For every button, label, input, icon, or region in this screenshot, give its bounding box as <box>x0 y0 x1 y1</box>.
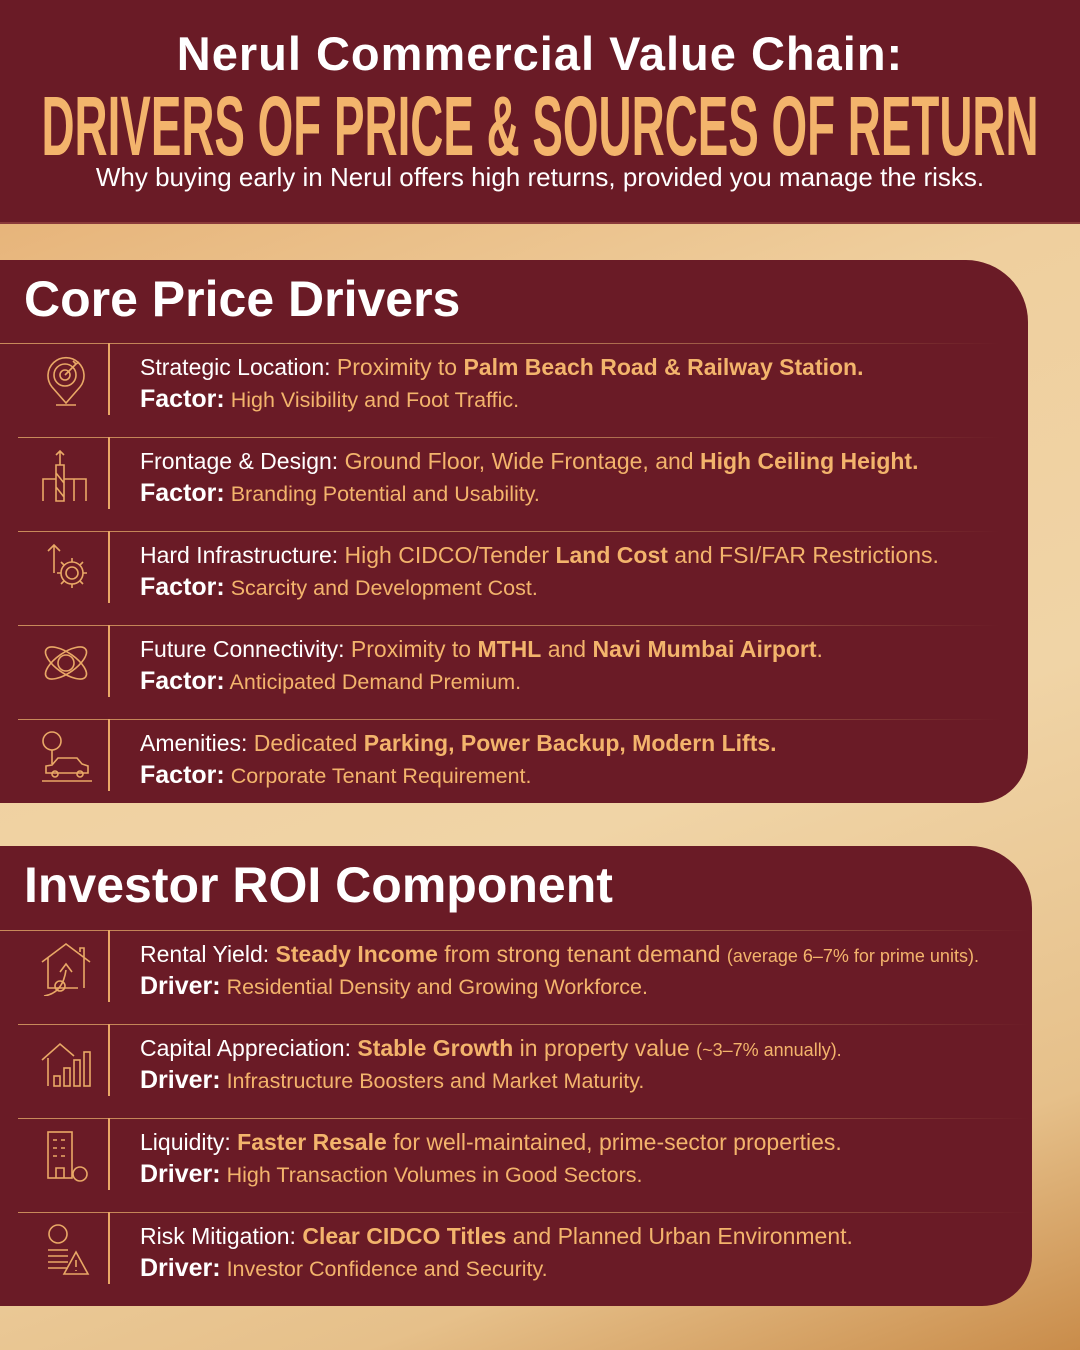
icon: house rupee <box>42 943 90 996</box>
row: frontage <box>18 437 963 509</box>
row: risk mitigation <box>18 1212 991 1284</box>
row: frontage: Factor: Branding Potential and Usability. <box>140 479 540 507</box>
icon: parking car <box>42 731 92 782</box>
heading: investor roi: Investor ROI Component <box>24 857 613 913</box>
row: hard infrastructure <box>18 531 962 603</box>
row: future connectivity: Factor: Anticipated Demand Premium. <box>140 667 521 695</box>
row: liquidity: Liquidity: Faster Resale for well-maintained, prime-sector properties. <box>140 1129 842 1155</box>
row: liquidity: Driver: High Transaction Volumes in Good Sectors. <box>140 1160 642 1188</box>
icon: orbit <box>44 646 88 680</box>
row: frontage: Frontage & Design: Ground Floor, Wide Frontage, and High Ceiling Height. <box>140 448 918 474</box>
row: strategic location <box>0 343 962 415</box>
row: rental yield <box>0 930 990 1002</box>
row: amenities <box>18 719 963 791</box>
row: capital appreciation: Driver: Infrastructure Boosters and Market Maturity. <box>140 1066 644 1094</box>
icon: buildings <box>42 450 87 502</box>
header <box>0 0 1080 224</box>
row: strategic location: Factor: High Visibility and Foot Traffic. <box>140 385 519 413</box>
icon: target pin <box>47 356 85 406</box>
icon: coins warning <box>48 1224 90 1275</box>
row: risk mitigation: Risk Mitigation: Clear CIDCO Titles and Planned Urban Environment. <box>140 1223 853 1249</box>
row: rental yield: Driver: Residential Density and Growing Workforce. <box>140 972 648 1000</box>
tagline: Why buying early in Nerul offers high returns, provided you manage the risks. <box>96 162 984 192</box>
icon: house chart <box>42 1043 91 1087</box>
row: capital appreciation <box>18 1024 991 1096</box>
title: Nerul Commercial Value Chain: <box>177 27 903 80</box>
icon: building coin <box>47 1131 88 1182</box>
row: future connectivity: Future Connectivity: Proximity to MTHL and Navi Mumbai Airport. <box>140 636 823 662</box>
panel: core price drivers <box>0 260 1028 803</box>
row: amenities: Factor: Corporate Tenant Requirement. <box>140 761 532 789</box>
subtitle heading: DRIVERS OF PRICE & SOURCES OF RETURN <box>41 79 1039 173</box>
row: rental yield: Rental Yield: Steady Income from strong tenant demand (average 6–7% for prime units). <box>140 941 979 967</box>
row: amenities: Amenities: Dedicated Parking, Power Backup, Modern Lifts. <box>140 730 777 756</box>
panel: investor roi component <box>0 846 1032 1306</box>
row: strategic location: Strategic Location: Proximity to Palm Beach Road & Railway Station. <box>140 354 864 380</box>
row: hard infrastructure: Hard Infrastructure: High CIDCO/Tender Land Cost and FSI/FAR Restrictions. <box>140 542 939 568</box>
heading: core price drivers: Core Price Drivers <box>24 271 460 327</box>
row: future connectivity <box>18 625 962 697</box>
icon: gear rupee <box>48 544 87 588</box>
row: liquidity <box>18 1118 991 1190</box>
row: hard infrastructure: Factor: Scarcity and Development Cost. <box>140 573 538 601</box>
row: risk mitigation: Driver: Investor Confidence and Security. <box>140 1254 548 1282</box>
row: capital appreciation: Capital Appreciation: Stable Growth in property value (~3–7% annually). <box>140 1035 842 1061</box>
